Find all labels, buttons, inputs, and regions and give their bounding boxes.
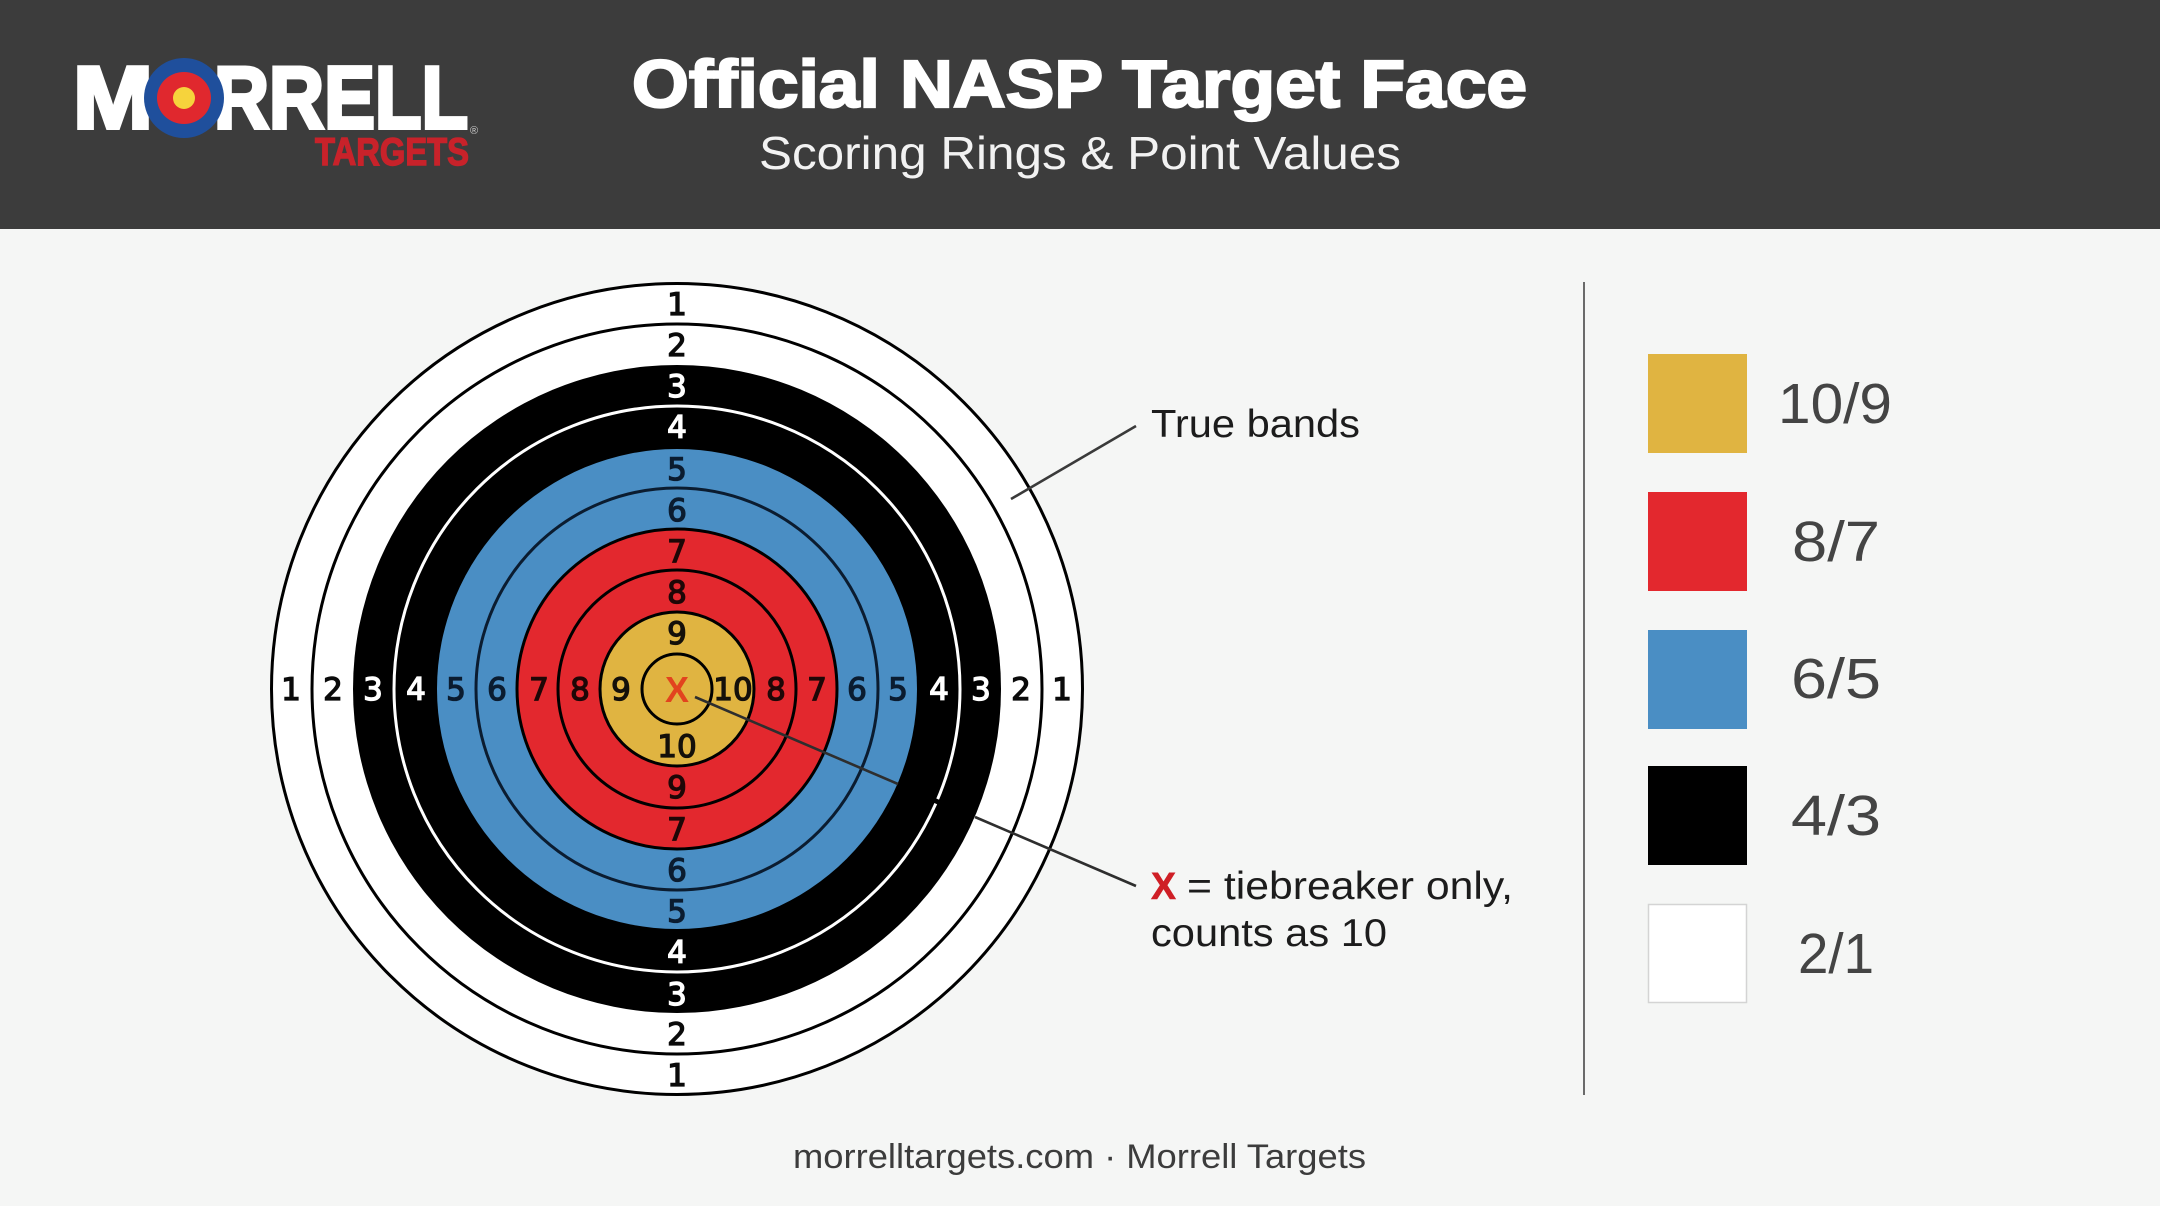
ring numbers: top column: 2 [667, 328, 687, 364]
ring numbers: right row: 10 [713, 672, 753, 708]
ring numbers: bottom column: 7 [667, 812, 687, 848]
target face [272, 284, 1082, 1094]
ring numbers: bottom column: 2 [667, 1017, 687, 1053]
logo: Morrell Targets: TARGETS [315, 131, 469, 174]
ring numbers: left row: 6 [487, 672, 507, 708]
callout: X tiebreaker: counts as 10 [1151, 912, 1387, 955]
center X mark: X [665, 669, 689, 710]
ring numbers: right row: 6 [847, 672, 867, 708]
logo: Morrell Targets: ® [470, 125, 478, 137]
ring numbers: right row: 1 [1052, 672, 1072, 708]
ring numbers: bottom column [657, 729, 697, 1094]
ring numbers: bottom column: 1 [667, 1058, 687, 1094]
ring 7 red [517, 529, 837, 849]
ring numbers: bottom column: 4 [667, 935, 687, 971]
ring 4 black [394, 406, 960, 972]
callout: X tiebreaker [695, 697, 1513, 955]
callout: X tiebreaker: X [1151, 866, 1177, 908]
ring numbers: right row: 5 [888, 672, 908, 708]
ring numbers: bottom column: 5 [667, 894, 687, 930]
ring numbers: right row: 2 [1011, 672, 1031, 708]
ring numbers: top column: 3 [667, 369, 687, 405]
ring 10 X inner [642, 654, 712, 724]
ring numbers: bottom column: 9 [667, 770, 687, 806]
logo: Morrell Targets: RRELL [214, 48, 468, 147]
ring numbers: left row: 8 [570, 672, 590, 708]
ring 8 red [558, 570, 796, 808]
legend item: 8/7 red: 8/7 [1792, 510, 1880, 574]
ring 9 gold [600, 612, 754, 766]
callout: X tiebreaker: = tiebreaker only, [1187, 865, 1513, 908]
footer: morrelltargets.com · Morrell Targets [793, 1138, 1366, 1176]
ring 3 black [353, 365, 1001, 1013]
ring numbers: top column [667, 287, 687, 652]
ring numbers: right row: 3 [971, 672, 991, 708]
title: Official NASP Target Face [632, 47, 1527, 122]
legend item: 10/9 gold: 10/9 [1778, 372, 1892, 436]
ring numbers: right row: 4 [929, 672, 949, 708]
legend item: 6/5 blue [1648, 630, 1881, 729]
logo: Morrell Targets: M [73, 48, 153, 147]
ring 2 white [312, 324, 1042, 1054]
ring numbers: bottom column: 6 [667, 853, 687, 889]
legend item: 2/1 white: 2/1 [1798, 922, 1874, 986]
ring numbers: left row: 9 [611, 672, 631, 708]
ring numbers: left row: 5 [446, 672, 466, 708]
ring 1 white [272, 284, 1082, 1094]
ring numbers: bottom column: 10 [657, 729, 697, 765]
ring numbers: top column: 7 [667, 534, 687, 570]
header band [0, 0, 2160, 229]
divider [1583, 282, 1585, 1095]
ring numbers: top column: 9 [667, 616, 687, 652]
ring numbers: top column: 1 [667, 287, 687, 323]
subtitle: Scoring Rings & Point Values [759, 127, 1401, 179]
ring numbers: top column: 4 [667, 410, 687, 446]
legend [1648, 354, 1892, 1002]
callout: true bands: True bands [1151, 403, 1360, 446]
ring numbers: left row: 3 [363, 672, 383, 708]
legend item: 6/5 blue: 6/5 [1791, 647, 1881, 711]
ring numbers: left row: 2 [323, 672, 343, 708]
legend item: 2/1 white [1648, 904, 1874, 1002]
ring numbers: right row [713, 672, 1072, 708]
ring numbers: bottom column: 3 [667, 977, 687, 1013]
ring numbers: left row: 4 [406, 672, 426, 708]
ring numbers: left row: 7 [529, 672, 549, 708]
legend item: 10/9 gold [1648, 354, 1892, 453]
ring numbers: left row: 1 [281, 672, 301, 708]
ring numbers: top column: 5 [667, 452, 687, 488]
ring numbers: right row: 8 [766, 672, 786, 708]
ring 5 blue [437, 449, 917, 929]
legend item: 4/3 black: 4/3 [1791, 784, 1881, 848]
ring numbers: top column: 6 [667, 493, 687, 529]
ring numbers: right row: 7 [807, 672, 827, 708]
callout: true bands [1011, 403, 1360, 499]
ring numbers: top column: 8 [667, 575, 687, 611]
logo: Morrell Targets [73, 48, 478, 174]
legend item: 8/7 red [1648, 492, 1880, 591]
ring 6 blue [476, 488, 878, 890]
legend item: 4/3 black [1648, 766, 1881, 865]
ring numbers: left row [281, 672, 631, 708]
